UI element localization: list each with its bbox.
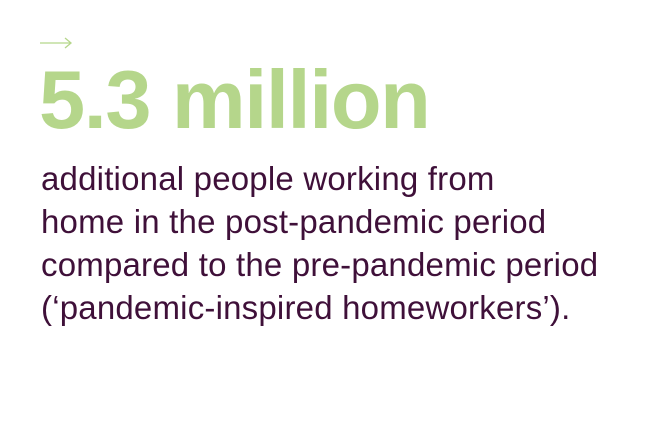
description text: additional people working from [41, 160, 495, 197]
description text: (‘pandemic-inspired homeworkers’). [41, 289, 570, 326]
headline number: 5.3 million [39, 53, 429, 146]
description text: compared to the pre-pandemic period [41, 246, 598, 283]
description text: home in the post-pandemic period [41, 203, 546, 240]
description text [41, 160, 598, 326]
icon: arrow [40, 38, 72, 48]
